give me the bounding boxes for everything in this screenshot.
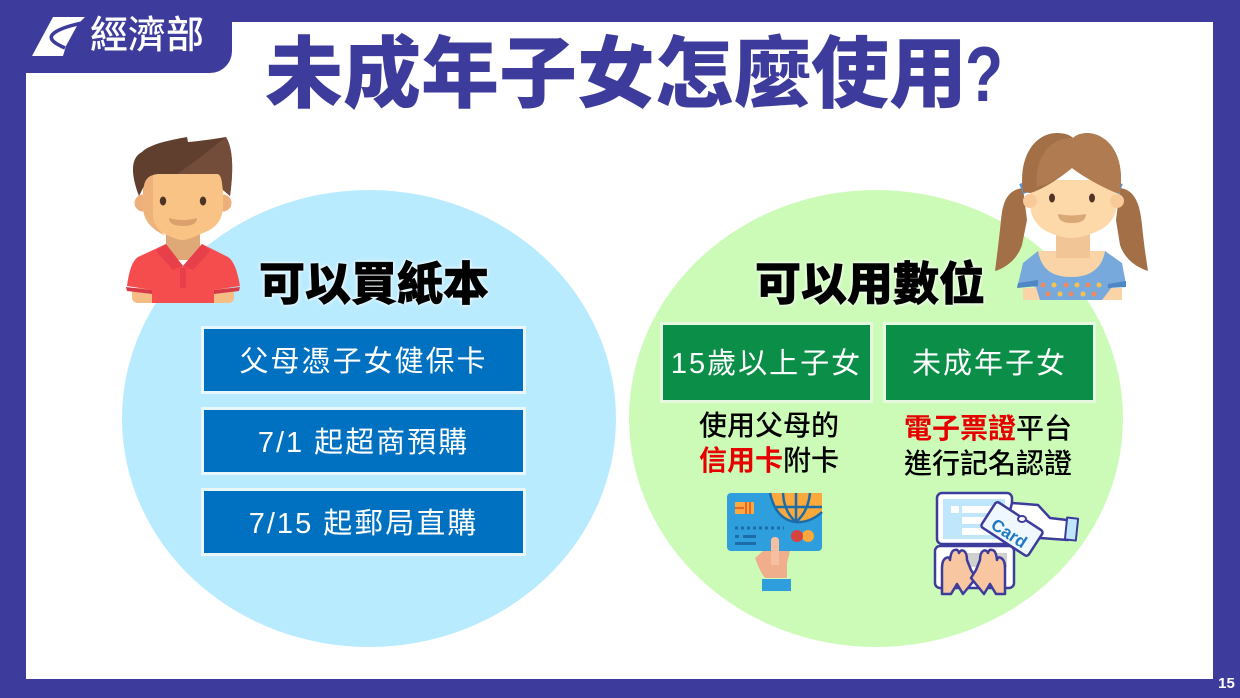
icon: boy	[126, 137, 240, 303]
text: parent's credit card: 信用卡附卡	[699, 445, 839, 476]
heading: digital: 可以用數位	[755, 258, 985, 310]
icon: ministry logo	[32, 17, 85, 56]
icon: girl	[995, 133, 1148, 300]
button: age 15 and over	[660, 322, 873, 403]
panel: digital ticket circle	[629, 190, 1123, 647]
button: health card: 父母憑子女健保卡	[239, 346, 488, 378]
title: 未成年子女怎麼使用	[265, 30, 967, 118]
title: ?	[965, 30, 1003, 118]
heading: paper: 可以買紙本	[259, 258, 489, 310]
button: post office	[201, 488, 526, 556]
button: convenience store: 7/1 起超商預購	[258, 427, 469, 459]
logo tab	[26, 0, 232, 73]
button: health card	[201, 326, 526, 394]
button: convenience store	[201, 407, 526, 475]
text: e-ticket platform	[904, 413, 1072, 479]
icon: laptop with card: Card	[988, 515, 1030, 552]
logo text: 經濟部	[90, 15, 204, 57]
button: post office: 7/15 起郵局直購	[249, 508, 478, 540]
button: age 15 and over: 15歲以上子女	[671, 348, 862, 380]
icon: credit card	[727, 492, 823, 591]
text: e-ticket platform: 電子票證平台	[904, 413, 1072, 444]
text: parent's credit card	[699, 410, 839, 476]
page number: 15	[1218, 675, 1235, 692]
button: minors: 未成年子女	[912, 348, 1067, 380]
icon: laptop with card	[934, 492, 1080, 596]
button: minors	[883, 322, 1096, 403]
panel: paper ticket circle	[122, 190, 616, 647]
text: parent's credit card: 使用父母的	[699, 410, 839, 441]
text: e-ticket platform: 進行記名認證	[904, 448, 1072, 479]
